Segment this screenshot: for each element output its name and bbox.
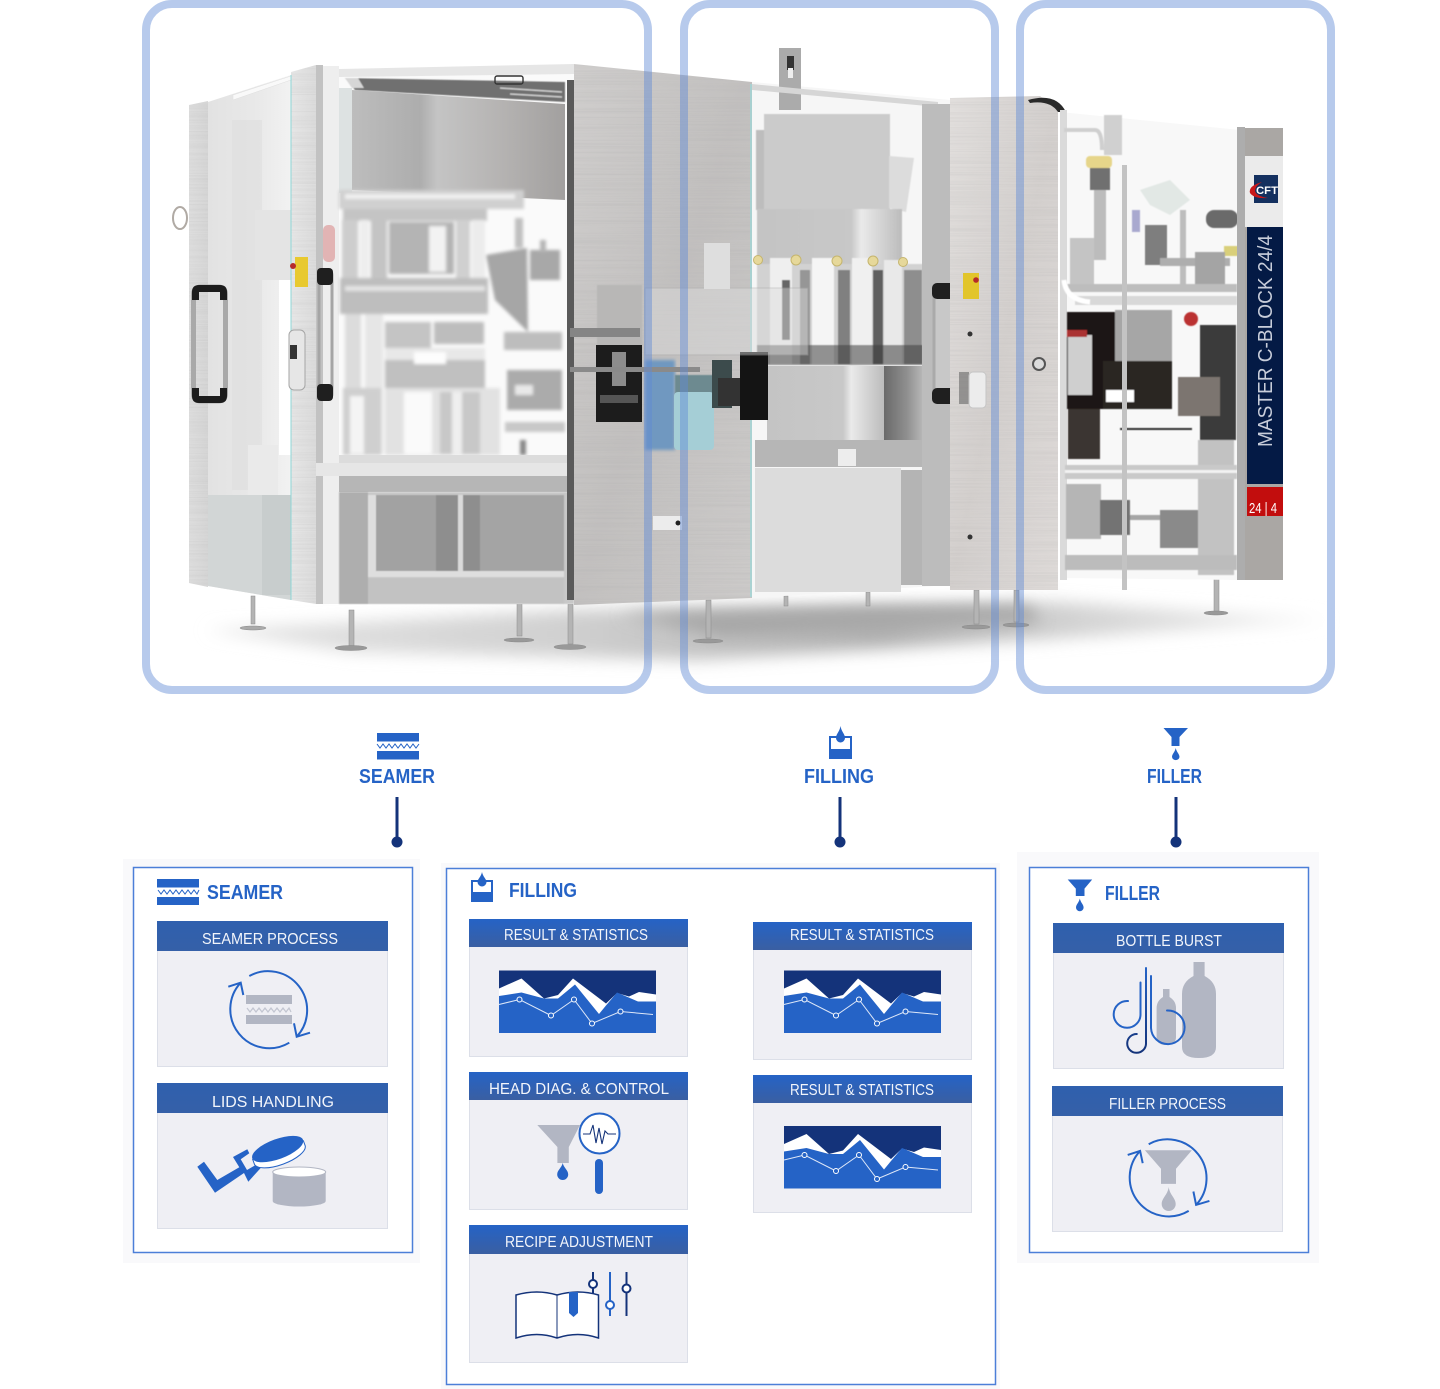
logo: CFT: CFT	[1256, 185, 1278, 197]
card: result and statistics 2: RESULT & STATISTICS	[790, 927, 934, 944]
icon: seamer	[377, 733, 419, 760]
heading: filler: FILLER	[1105, 883, 1160, 905]
card: head diagnostics and control: HEAD DIAG. & CONTROL	[489, 1081, 669, 1098]
brushed steel centre panel	[574, 64, 752, 605]
label: seamer callout	[359, 733, 435, 848]
icon: filling heading	[471, 872, 493, 902]
label: filling callout: FILLING	[804, 766, 874, 788]
card: lids handling: LIDS HANDLING	[212, 1094, 334, 1111]
card: result and statistics 2	[753, 922, 972, 1060]
machine side plate with logo	[1237, 127, 1283, 580]
icon: filler heading	[1068, 880, 1092, 911]
card: result and statistics 3: RESULT & STATISTICS	[790, 1082, 934, 1099]
panel: filler	[1017, 852, 1319, 1263]
card: bottle burst: BOTTLE BURST	[1116, 933, 1222, 950]
heading: seamer: SEAMER	[207, 882, 283, 904]
card: result and statistics 1	[469, 919, 688, 1056]
section frame: filling	[684, 4, 995, 690]
label: filler callout: FILLER	[1147, 766, 1202, 788]
chart: area graph	[784, 1126, 941, 1188]
seamer door columns	[289, 65, 339, 604]
card: bottle burst	[1053, 923, 1284, 1068]
chart: area graph	[499, 970, 656, 1033]
card: head diagnostics and control	[469, 1072, 688, 1210]
label: seamer callout: SEAMER	[359, 766, 435, 788]
machine model name: MASTER C-BLOCK 24/4	[1255, 235, 1277, 447]
card: filler process: FILLER PROCESS	[1109, 1096, 1226, 1113]
machine feet	[240, 578, 1228, 650]
card: seamer process	[157, 921, 388, 1066]
floor shadow	[205, 602, 1330, 660]
icon: seamer heading	[157, 879, 199, 905]
section frame: filler	[1020, 4, 1331, 690]
panel: seamer	[123, 859, 420, 1263]
machine photo: Master C-Block 24/4	[173, 48, 1330, 660]
card: result and statistics 3	[753, 1075, 972, 1212]
icon: filler cycle	[1128, 1139, 1209, 1216]
card: lids handling	[157, 1083, 388, 1228]
card: filler process	[1052, 1086, 1283, 1232]
section frame: seamer	[146, 4, 648, 690]
seamer door, open left side	[173, 75, 291, 600]
card: recipe adjustment	[469, 1225, 688, 1362]
card: seamer process: SEAMER PROCESS	[202, 931, 338, 948]
icon: filler	[1164, 728, 1188, 760]
label: filler callout	[1147, 728, 1202, 848]
icon: recipe book and sliders	[516, 1272, 630, 1338]
filler piping section	[1060, 110, 1240, 590]
card: recipe adjustment: RECIPE ADJUSTMENT	[505, 1234, 653, 1251]
logo: CFT	[1250, 175, 1278, 203]
label: filling callout	[804, 726, 874, 848]
seamer interior	[316, 64, 575, 604]
icon: seamer cycle	[228, 971, 310, 1048]
card: result and statistics 1: RESULT & STATISTICS	[504, 927, 648, 944]
centre gearbox and motor	[570, 243, 808, 530]
model badge: 24 | 4	[1249, 500, 1277, 517]
right steel panel	[950, 96, 1066, 590]
panel: filling	[441, 863, 1000, 1389]
chart: area graph	[784, 970, 941, 1033]
icon: bottles and burst curls	[1114, 962, 1216, 1058]
icon: filling	[829, 726, 852, 758]
icon: gripper and lid	[197, 1130, 326, 1206]
heading: filling: FILLING	[509, 880, 577, 902]
filling door interior	[751, 48, 957, 598]
icon: funnel with magnifier	[537, 1114, 620, 1194]
